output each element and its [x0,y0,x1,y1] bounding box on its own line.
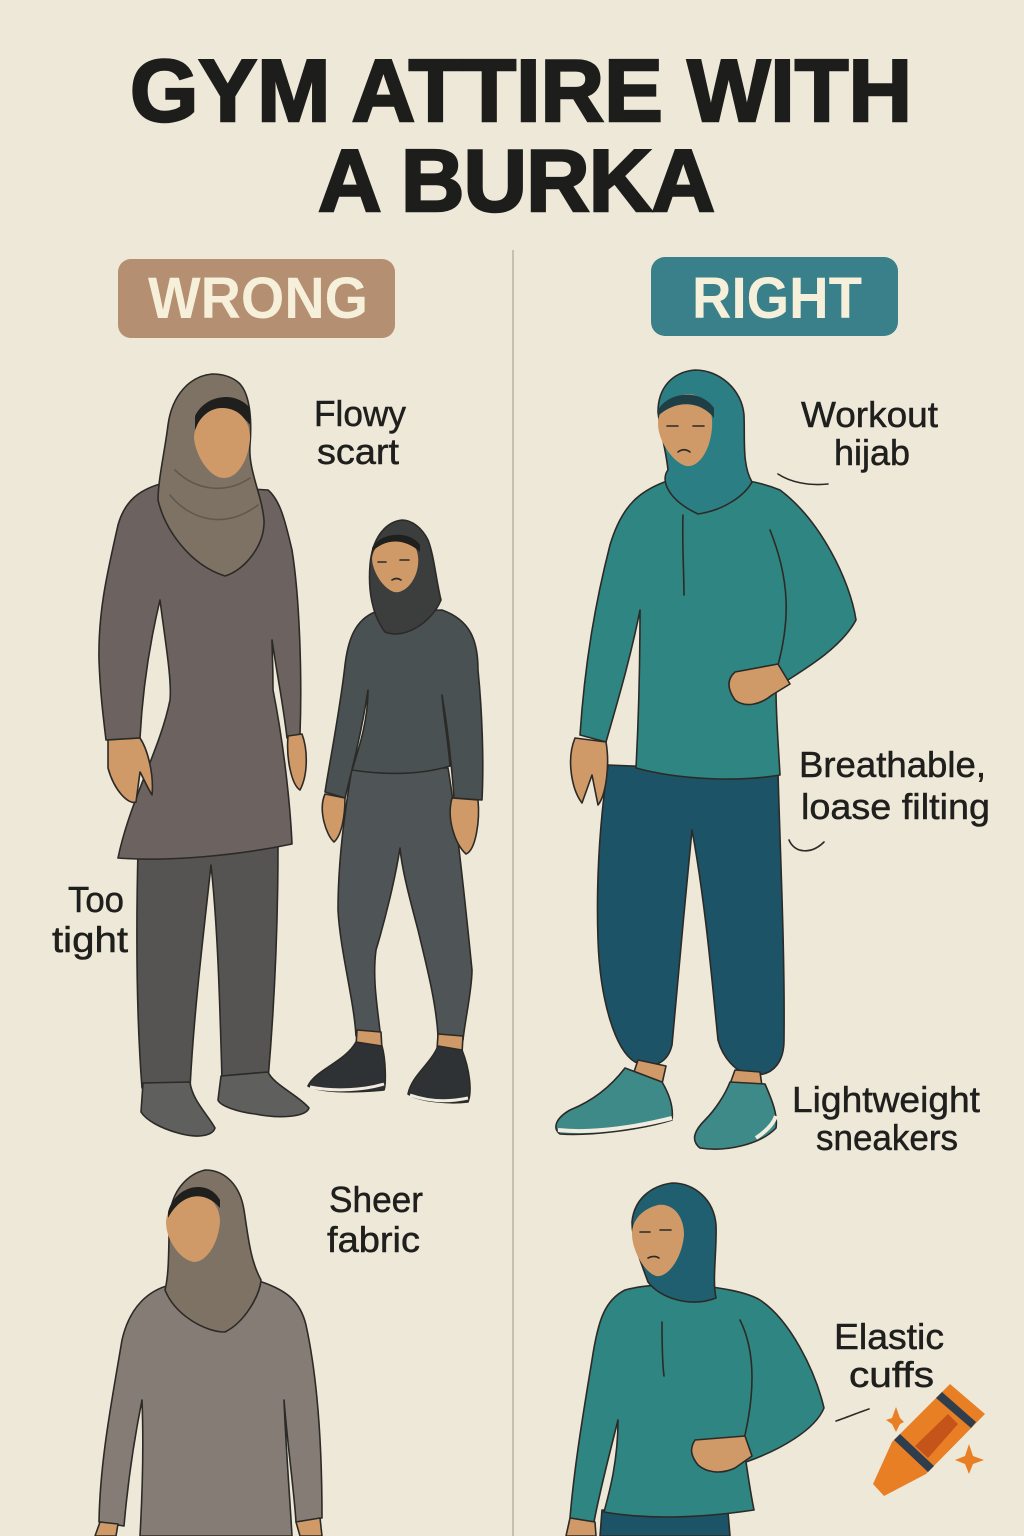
face [372,536,418,592]
pants [600,1510,730,1536]
figure: smaller woman, wrong outfit [308,520,483,1103]
face [194,408,250,478]
hands [566,1436,752,1536]
badge: wrong: WRONG [148,266,368,331]
leggings [338,768,472,1040]
figure: upper body, sheer fabric [95,1170,322,1536]
label: elastic cuffs: Elastic [834,1316,944,1357]
hands [571,664,790,805]
label: workout hijab: hijab [834,432,910,473]
sneakers [556,1060,776,1149]
sneakers [308,1030,470,1103]
hijab [632,1183,716,1302]
pants [137,845,278,1088]
label: flowy scarf: Flowy [314,393,406,434]
badge: right [651,257,898,336]
label: flowy scarf: scart [317,431,399,472]
label: too tight [52,879,128,960]
hands [95,1518,322,1536]
pullover [580,479,856,779]
face [632,1205,684,1276]
face [166,1194,220,1262]
head band [195,397,250,430]
hands [108,734,306,802]
title: GYM ATTIRE WITH [130,41,912,140]
title: A BURKA [318,131,715,230]
label: too tight: Too [68,879,124,920]
label: elastic cuffs: cuffs [849,1354,934,1395]
joggers [597,765,784,1075]
face [658,394,712,466]
label: flowy scarf [314,393,406,472]
hijab [658,370,752,514]
label: sheer fabric: fabric [327,1219,420,1260]
label: sheer fabric: Sheer [329,1179,423,1220]
hands [322,794,478,854]
label: breathable, loose fitting [789,744,990,851]
icon: crayon with sparkles [873,1384,985,1496]
figure: woman, right outfit [556,370,856,1149]
hijab [158,374,264,576]
hijab [370,520,441,634]
top [325,610,483,800]
label: lightweight sneakers: sneakers [816,1117,958,1158]
label: workout hijab: Workout [801,394,938,435]
top [99,1282,322,1536]
label: elastic cuffs [834,1316,944,1421]
shoes [141,1072,309,1136]
title [130,41,912,230]
label: too tight: tight [52,919,128,960]
badge: right: RIGHT [692,266,862,331]
label: sheer fabric [327,1179,423,1260]
label: breathable, loose fitting: Breathable, [799,744,986,785]
pullover [570,1285,824,1522]
label: lightweight sneakers [792,1079,980,1158]
badge: wrong [118,259,395,338]
label: breathable, loose fitting: loase filting [801,786,990,827]
tunic [99,484,301,859]
hijab [165,1170,261,1332]
figure: tall woman, wrong outfit [99,374,309,1136]
figure: upper body, elastic cuffs [566,1183,824,1536]
label: workout hijab [778,394,938,485]
label: lightweight sneakers: Lightweight [792,1079,980,1120]
